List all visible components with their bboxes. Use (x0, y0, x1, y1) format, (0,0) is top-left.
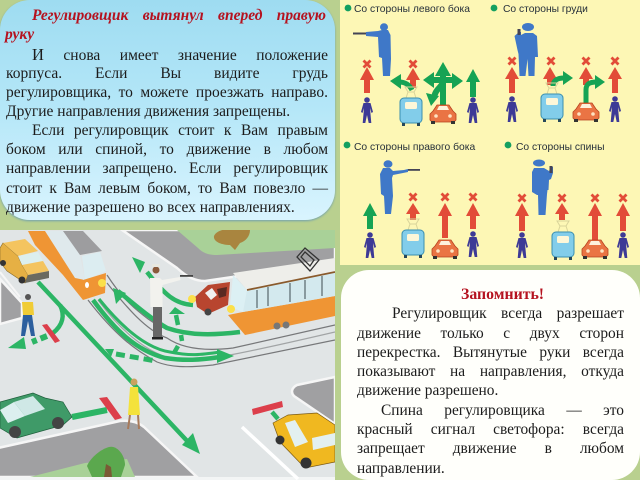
heading: from the left side: Со стороны левого бока (354, 3, 470, 15)
road blocks and grass (0, 229, 335, 480)
arrow: red and green tram (390, 60, 420, 90)
arrow: red forbidden pedestrian (360, 60, 374, 93)
arrow: green all directions (423, 62, 463, 106)
icon: pedestrians and vehicles (361, 87, 479, 126)
text block: rule paragraphs: Другие направления движения запрещены. (6, 103, 290, 120)
text block: rule paragraphs: стоит к Вам левым боком, то Вам повезло — (6, 180, 328, 197)
panel: right side view (344, 141, 480, 259)
text block: rule paragraphs: движение разрешено во всех направлениях. (6, 199, 295, 216)
red stop bars (42, 324, 283, 420)
text block: remember paragraphs: показывают на направления, откуда (357, 363, 624, 380)
icon: officer chest (514, 23, 538, 76)
heading: from the chest: Со стороны груди (503, 4, 588, 15)
panel: traffic directions background (340, 0, 640, 265)
arrows: right side directions (363, 194, 480, 238)
heading: from the back: Со стороны спины (516, 142, 604, 153)
text block: rule paragraphs: корпуса. Если Вы видите грудь (6, 65, 328, 82)
tram left (28, 231, 106, 300)
pedestrian in yellow dress (128, 378, 140, 429)
heading: from the right side: Со стороны правого бока (354, 141, 475, 153)
icon: officer right side (380, 160, 420, 214)
arrows: green movement paths (32, 272, 278, 444)
panel: remember box (341, 270, 640, 480)
text block: rule paragraphs: боком или спиной, то движение в любом (6, 141, 328, 158)
text block: rule paragraphs: И снова имеет значение положение (32, 45, 328, 64)
heading: remember: Запомнить! (461, 286, 544, 303)
text block: rule paragraphs (6, 45, 328, 216)
icon: back pedestrians and vehicles (516, 221, 629, 260)
green car (0, 393, 72, 438)
text block: remember paragraphs: перекрестка. Вытянутые руки всегда (357, 344, 624, 361)
icon: right side pedestrians and vehicles (364, 219, 479, 259)
icon: chest pedestrians and vehicles (506, 83, 621, 122)
text block: remember paragraphs: красный сигнал светофора: всегда (357, 421, 624, 438)
car top left (0, 239, 49, 284)
heading: right arm forward (4, 7, 326, 43)
heading: right arm forward: Регулировщик вытянул вперед правую (32, 7, 326, 24)
arrowheads: green (8, 257, 234, 454)
text block: remember paragraphs: Спина регулировщика — это (381, 402, 624, 419)
text block: rule paragraphs: направлении запрещено. Если регулировщик (6, 160, 328, 177)
panel: back view (505, 142, 630, 260)
text block: remember paragraphs (357, 305, 624, 477)
traffic officer (150, 264, 193, 340)
heading: right arm forward: руку (5, 26, 34, 43)
icon: officer left side (353, 23, 391, 76)
pedestrian with yellow vest (21, 294, 35, 336)
illustration: intersection scene (0, 229, 335, 480)
text block: remember paragraphs: движение разрешено. (357, 382, 498, 399)
arrows: back directions (515, 194, 630, 240)
panel: rule explanation (0, 0, 335, 220)
yellow car (273, 413, 335, 468)
text block: remember paragraphs: движение только с двух сторон (357, 325, 624, 342)
text block: remember paragraphs: запрещает движение в любом (357, 440, 624, 457)
panel: chest view (491, 4, 622, 122)
text block: remember paragraphs: направлении. (357, 460, 445, 477)
text block: rule paragraphs: Если регулировщик стоит к Вам правым (32, 122, 328, 139)
panel: left side view (345, 3, 480, 126)
arrow: green pedestrian (466, 69, 480, 97)
car behind officer (188, 282, 230, 316)
text block: rule paragraphs: регулировщика, то можете проезжать направо. (6, 84, 328, 101)
arrows: chest view directions (505, 58, 622, 103)
tram right (227, 248, 335, 335)
tram tracks (88, 275, 335, 367)
icon: officer back (532, 160, 553, 215)
text block: remember paragraphs: Регулировщик всегда разрешает (392, 305, 624, 322)
